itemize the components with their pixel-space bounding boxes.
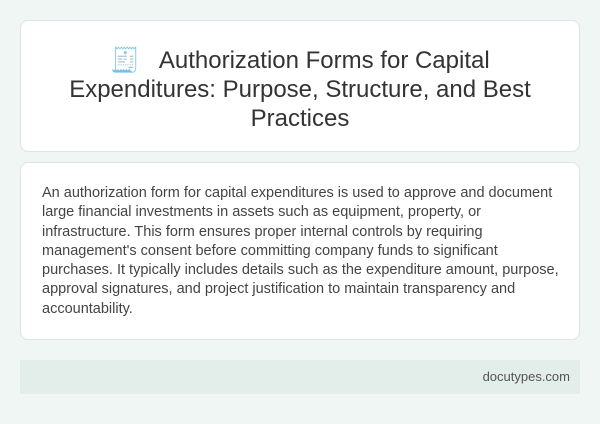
title: 🧾 Authorization Forms for Capital Expenditures: Purpose, Structure, and Best Practices: [69, 47, 531, 132]
footer: docutypes.com: [483, 369, 570, 384]
description card: [20, 162, 580, 340]
description text: An authorization form for capital expenditures is used to approve and document large financial investments in assets such as equipment, property, or infrastructure. This form ensures proper internal controls by requiring management's consent before committing company funds to significant purchases. It typically includes details such as the expenditure amount, purpose, approval signatures, and project justification to maintain transparency and accountability.: [42, 185, 559, 317]
footer: [20, 360, 580, 394]
title card: [20, 20, 580, 152]
